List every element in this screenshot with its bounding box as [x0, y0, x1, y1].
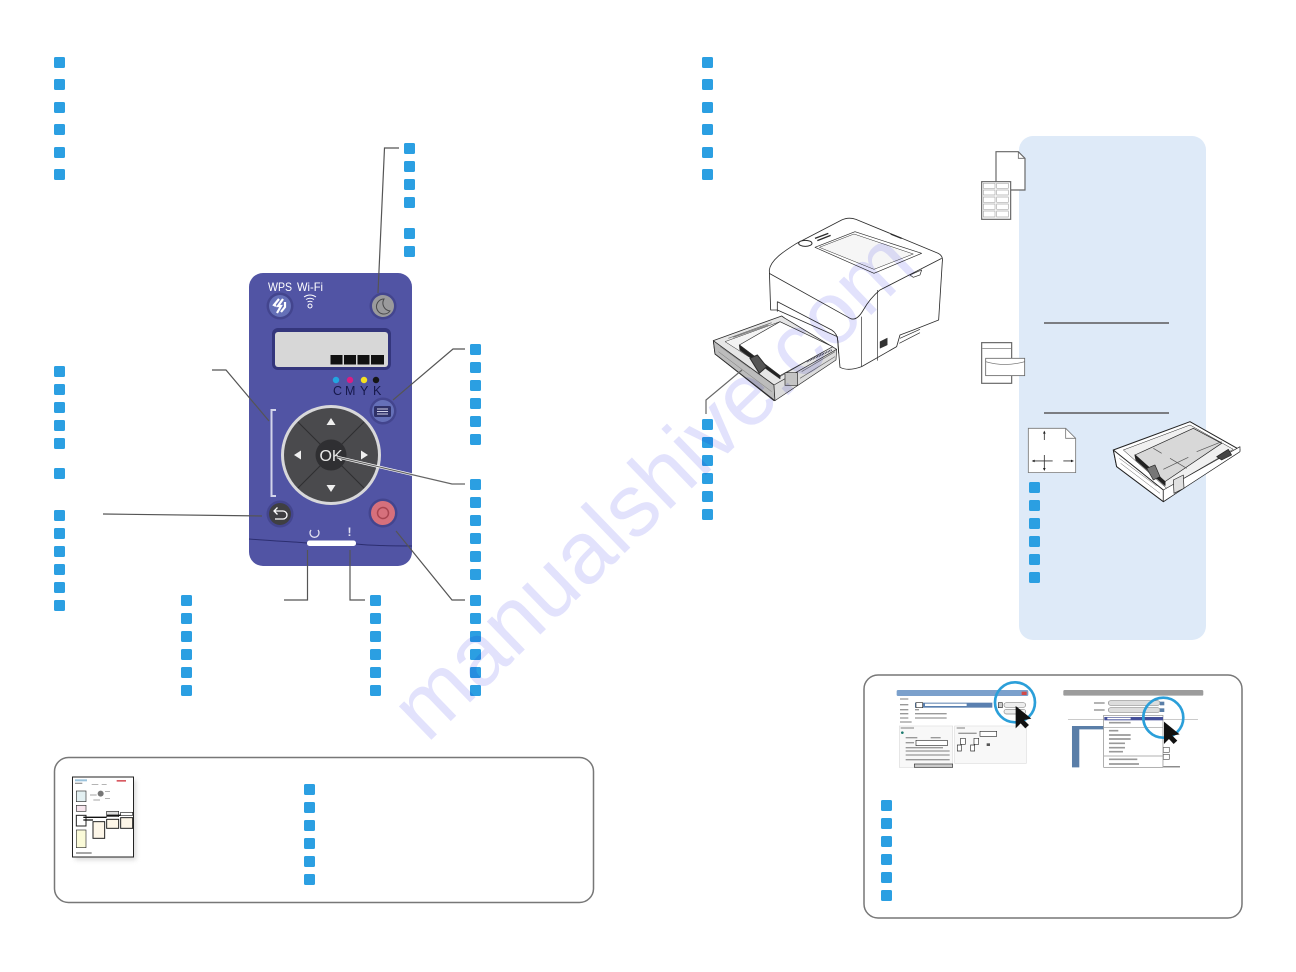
WPS label: WPS [268, 280, 292, 294]
document thumbnail [72, 777, 136, 860]
list markers: top left [54, 57, 65, 180]
leader lines [103, 148, 465, 600]
screenshot: Windows print dialog [897, 682, 1035, 767]
Wi-Fi label: Wi-Fi [297, 280, 323, 294]
illustration: paper tray [1113, 422, 1240, 502]
tray leader line [706, 370, 742, 414]
list markers: power saver [404, 143, 415, 257]
illustration: printer with open tray [713, 218, 942, 401]
list markers: tray [702, 419, 713, 520]
back button [266, 500, 294, 528]
list markers: top right [702, 57, 713, 180]
indicator light [307, 540, 356, 546]
cancel button [368, 498, 398, 528]
list markers: paper guides [1029, 482, 1040, 583]
ready icon [310, 530, 319, 537]
LCD display [272, 328, 391, 370]
panel: media info background [1019, 136, 1206, 640]
toner colour indicators: K [373, 384, 382, 398]
icon: paper guide sheet [1028, 428, 1076, 473]
list markers: menu button [470, 344, 481, 445]
error icon: ! [348, 525, 352, 539]
watermark: manualshive.com [371, 211, 933, 758]
screenshot: Macintosh print dialog [1063, 690, 1203, 767]
WPS button [266, 292, 294, 320]
power saver button [370, 292, 396, 320]
list markers: ready indicator [181, 595, 192, 696]
navigation pad [281, 405, 381, 505]
list markers: error indicator [370, 595, 381, 696]
toner colour indicators: C [333, 384, 342, 398]
list markers: back button [54, 510, 65, 611]
OK button: OK [319, 448, 343, 465]
toner colour indicators: Y [360, 384, 369, 398]
panel: driver box [864, 675, 1242, 918]
nav bracket [272, 410, 276, 496]
toner colour indicators [333, 377, 382, 398]
control panel [249, 273, 412, 566]
list markers: navigation buttons [54, 366, 65, 479]
icon: labels sheets [982, 152, 1025, 219]
list markers: documentation [304, 784, 315, 885]
divider rules [1044, 323, 1169, 413]
list markers: cancel button [470, 595, 481, 696]
menu button [370, 398, 396, 424]
icon: envelopes [982, 343, 1025, 383]
panel: documentation box [54, 758, 594, 902]
list markers: OK button [470, 479, 481, 580]
toner colour indicators: M [345, 384, 355, 398]
icon: wifi [304, 295, 316, 308]
list markers: driver options [881, 800, 892, 901]
